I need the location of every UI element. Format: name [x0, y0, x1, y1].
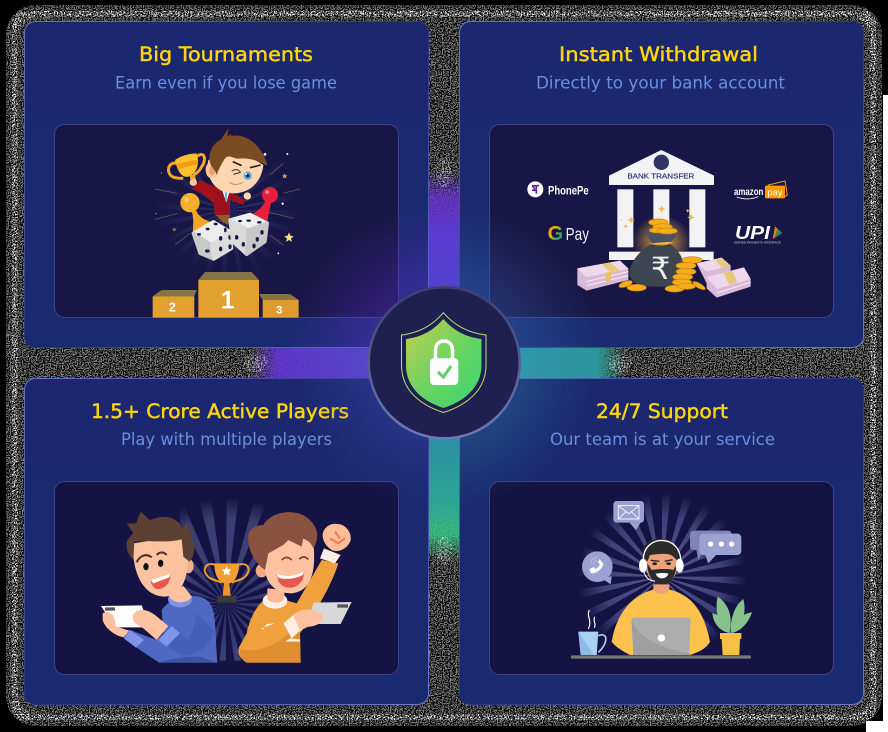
- icon: bank building: BANK TRANSFER: [627, 172, 695, 181]
- corner glows around the badge: [304, 222, 578, 490]
- icon: bank building: [609, 150, 714, 260]
- logo: google pay: G: [548, 223, 563, 245]
- icon: gold coins: [618, 219, 706, 292]
- icon: chat bubbles: [690, 531, 741, 563]
- panel: instant withdrawal: [460, 22, 864, 348]
- subheading: support: Our team is at your service: [550, 430, 775, 449]
- illustration: two players with trophy: [101, 512, 352, 663]
- character: boy in blue sweater: [101, 512, 217, 663]
- heading: support: 24/7 Support: [596, 400, 728, 423]
- illustration: support agent at laptop: [571, 501, 752, 659]
- logo: google pay: [548, 223, 589, 245]
- sparkles: [620, 205, 695, 229]
- podium: 2: [169, 300, 176, 314]
- inner panel: players: [54, 482, 398, 674]
- heading: instant withdrawal: Instant Withdrawal: [559, 43, 758, 66]
- panel: active players: [24, 378, 428, 704]
- money stacks: [577, 258, 751, 298]
- icon: coffee mug: [578, 610, 606, 655]
- heading: active players: 1.5+ Crore Active Players: [91, 400, 349, 423]
- podium: [153, 272, 299, 318]
- gap glow: right teal: [515, 348, 625, 378]
- icon: email bubble: [613, 501, 644, 530]
- logo: phonepe: [527, 181, 589, 197]
- illustration: tournament winner on dice with podium: [153, 128, 300, 318]
- inner panel: support: [490, 482, 834, 674]
- logo: upi: UNIFIED PAYMENTS INTERFACE: [734, 240, 781, 244]
- icon: red pawn: [250, 187, 278, 222]
- podium: 1: [221, 288, 235, 315]
- logo: amazon pay: pay: [767, 187, 783, 197]
- panel: big tournaments: [24, 22, 428, 348]
- character: boy in red blazer: [192, 128, 267, 225]
- gap glow: top purple: [429, 170, 459, 295]
- inner panel: withdrawal: [490, 124, 834, 318]
- icon: left die: [193, 222, 232, 259]
- gap glow: left purple: [250, 348, 375, 378]
- heading: big tournaments: Big Tournaments: [139, 43, 313, 66]
- icon: money bag: ₹: [651, 252, 670, 287]
- logo: upi: [734, 222, 782, 244]
- gap sparkle noise: [244, 157, 632, 564]
- icon: right die: [230, 214, 267, 254]
- icon: money bag: [629, 230, 685, 287]
- inner panel: tournaments: [54, 124, 398, 318]
- icon: laptop: [631, 618, 691, 655]
- logo: google pay: Pay: [566, 224, 589, 244]
- panel: support: [460, 378, 864, 704]
- character: boy in orange sweater: [238, 512, 352, 663]
- logo: upi: UPI: [735, 222, 771, 243]
- icon: padlock with check: [430, 341, 458, 385]
- subheading: big tournaments: Earn even if you lose game: [115, 74, 337, 92]
- icon: phone bubble: [582, 551, 613, 584]
- logo: amazon pay: amazon: [734, 187, 763, 198]
- icon: trophy in hand: [168, 153, 204, 186]
- subheading: active players: Play with multiple players: [121, 430, 332, 449]
- icon: shield fill: [406, 319, 482, 408]
- podium: 3: [276, 304, 282, 316]
- desk: [571, 655, 751, 659]
- icon: potted plant: [712, 597, 752, 655]
- logo: phonepe: PhonePe: [548, 184, 589, 197]
- illustration: bank transfer with money bag: [527, 150, 787, 298]
- subheading: instant withdrawal: Directly to your bank account: [536, 74, 786, 92]
- icon: trophy: [205, 563, 249, 603]
- gap glow: bottom teal: [429, 435, 459, 560]
- logo: amazon pay: [734, 181, 787, 199]
- central security badge: [369, 287, 520, 438]
- icon: gold pawn: [180, 193, 214, 239]
- icon: shield outline: [402, 313, 486, 412]
- character: support agent: [612, 539, 710, 655]
